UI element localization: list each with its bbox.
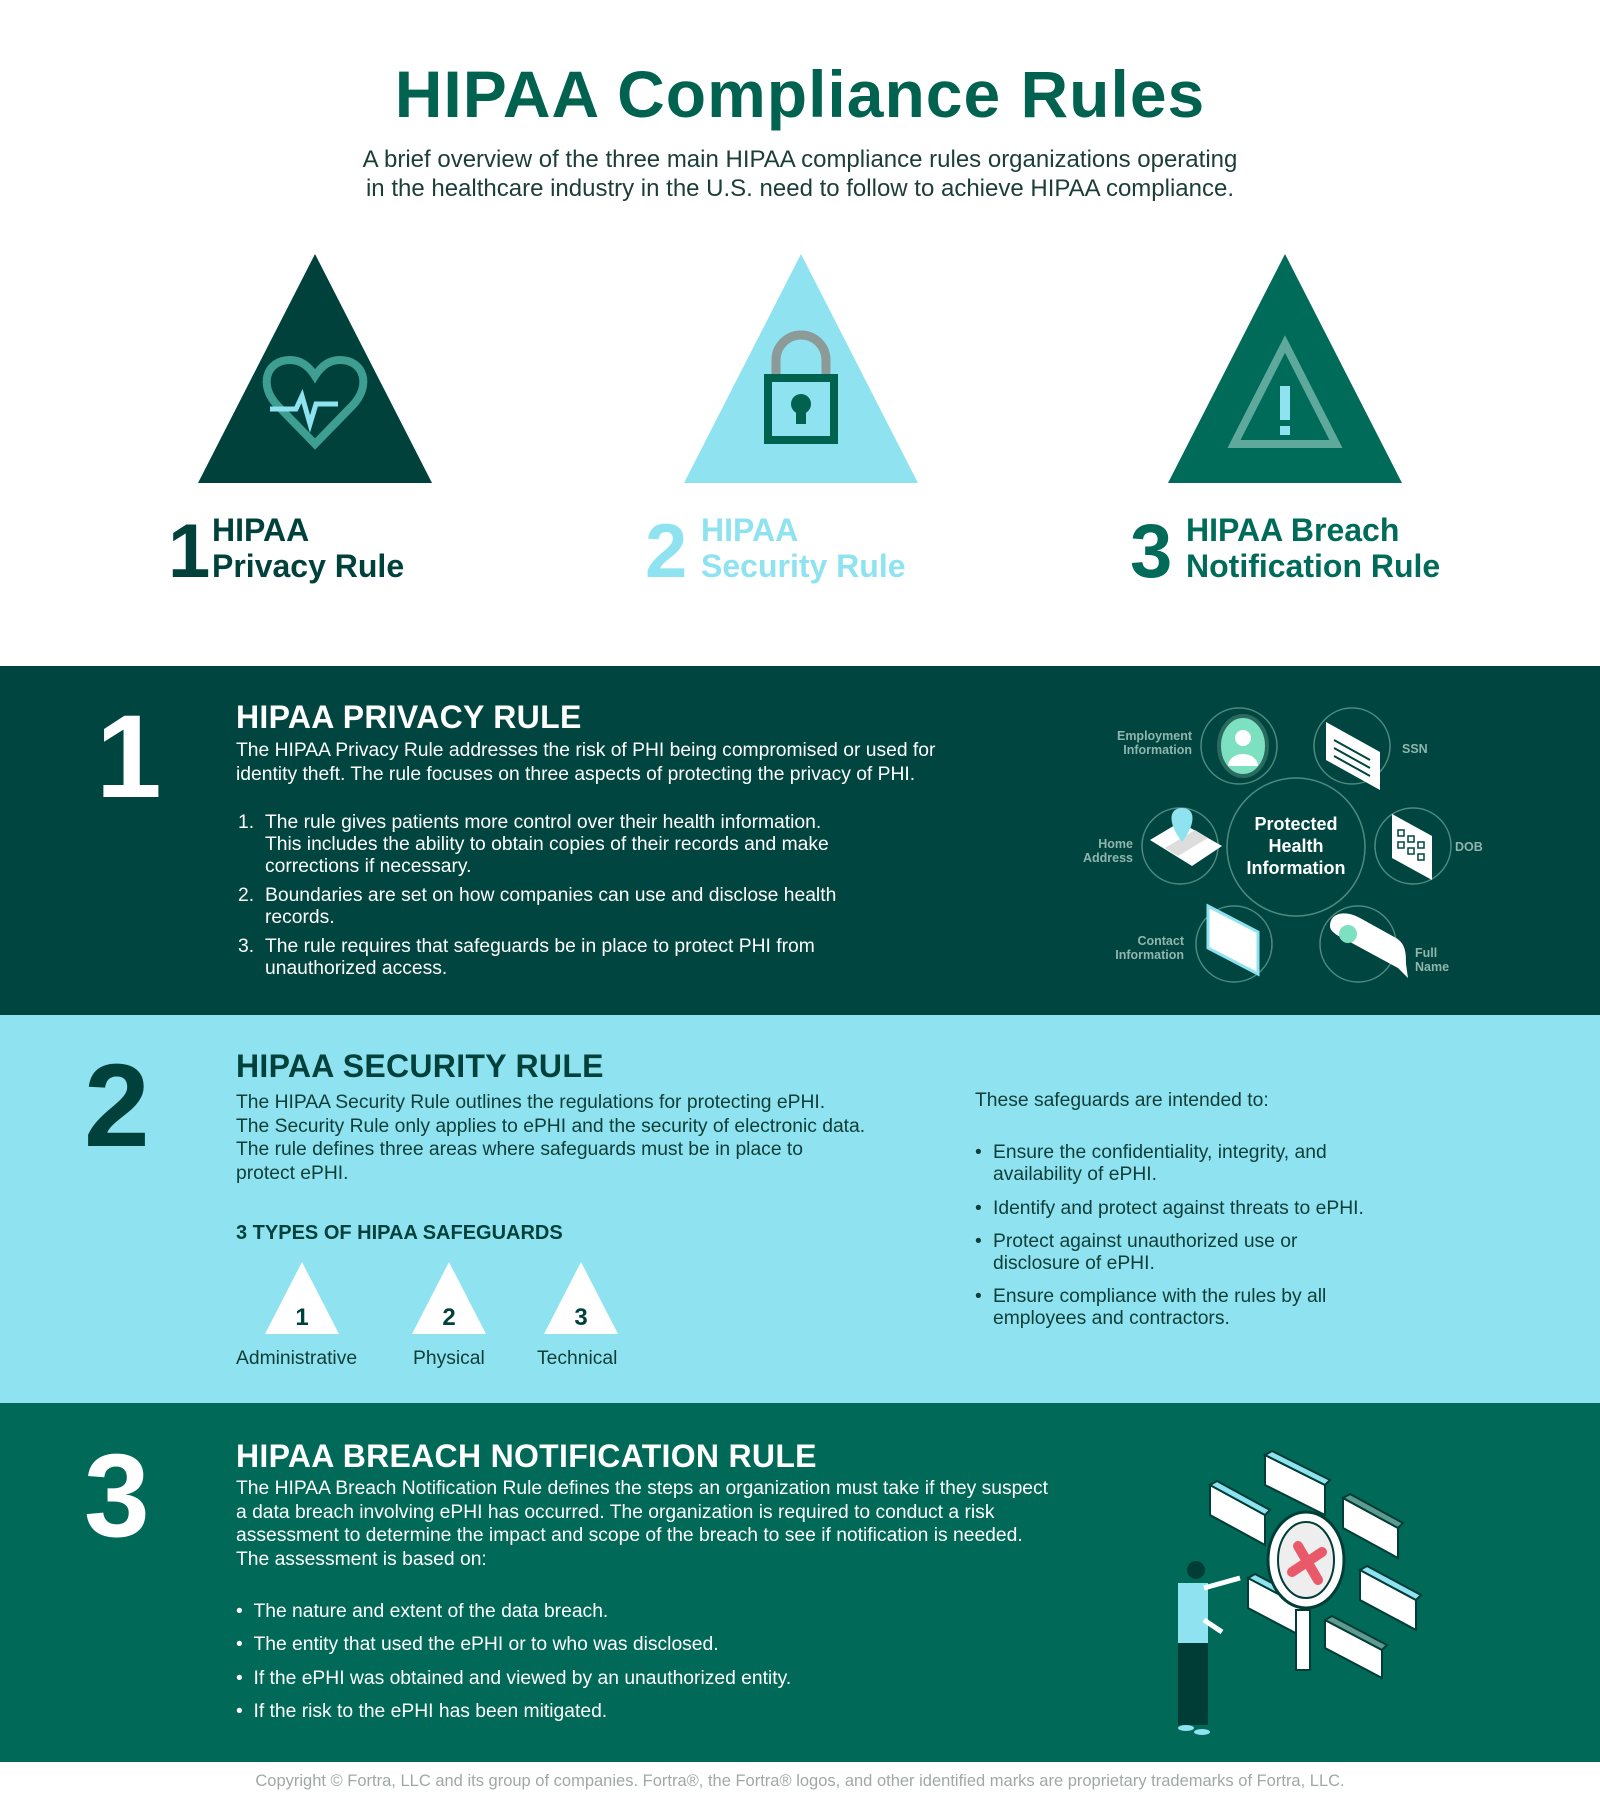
text: 1 xyxy=(168,509,210,594)
PHI diagram: DOB xyxy=(1455,840,1483,854)
paragraph: The HIPAA Privacy Rule addresses the risk of PHI being compromised or used for xyxy=(236,740,935,761)
panel: security rule: availability of ePHI. xyxy=(993,1164,1157,1185)
rule label 1 xyxy=(168,509,404,594)
icon: breach triangle xyxy=(1168,254,1402,483)
icon: security triangle xyxy=(684,254,918,483)
panel: security rule: employees and contractors. xyxy=(993,1308,1230,1329)
PHI diagram: Address xyxy=(1083,851,1133,865)
paragraph: The HIPAA Security Rule outlines the regulations for protecting ePHI. xyxy=(236,1092,825,1113)
panel: privacy rule: Boundaries are set on how companies can use and disclose health xyxy=(265,885,836,906)
panel: security rule: disclosure of ePHI. xyxy=(993,1253,1155,1274)
panel: security rule: Protect against unauthorized use or xyxy=(993,1231,1297,1252)
panel: privacy rule: unauthorized access. xyxy=(265,958,447,979)
panel: security rule: • xyxy=(975,1286,982,1307)
panel: breach notification rule: • The entity that used the ePHI or to who was disclosed. xyxy=(236,1634,719,1655)
text: 3 xyxy=(1130,509,1172,594)
text: Notification Rule xyxy=(1186,548,1440,584)
PHI diagram: Contact xyxy=(1137,934,1185,948)
paragraph xyxy=(236,740,936,784)
PHI diagram: Employment xyxy=(1117,729,1193,743)
PHI diagram: Name xyxy=(1415,960,1449,974)
panel: privacy rule: 3. xyxy=(238,936,254,957)
paragraph: protect ePHI. xyxy=(236,1162,349,1184)
panel: breach notification rule: • If the risk to the ePHI has been mitigated. xyxy=(236,1701,607,1722)
safeguard triangles xyxy=(236,1262,618,1369)
paragraph: The rule defines three areas where safeguards must be in place to xyxy=(236,1139,803,1160)
bullet list xyxy=(236,1601,791,1722)
text: HIPAA Breach xyxy=(1186,512,1399,548)
PHI diagram: Information xyxy=(1115,948,1184,962)
paragraph: The HIPAA Breach Notification Rule defines the steps an organization must take if they suspect xyxy=(236,1478,1048,1499)
safeguard triangles: 2 xyxy=(442,1304,456,1331)
heading: HIPAA SECURITY RULE xyxy=(236,1048,604,1084)
numbered list xyxy=(238,812,836,979)
number 3: 3 xyxy=(84,1430,146,1562)
text: 2 xyxy=(645,509,687,594)
panel: security rule: • xyxy=(975,1142,982,1163)
heading: HIPAA PRIVACY RULE xyxy=(236,699,582,735)
text: HIPAA xyxy=(701,512,798,548)
panel: security rule: Ensure the confidentiality, integrity, and xyxy=(993,1142,1327,1163)
paragraph: The Security Rule only applies to ePHI and the security of electronic data. xyxy=(236,1116,865,1136)
subtitle: in the healthcare industry in the U.S. need to follow to achieve HIPAA compliance. xyxy=(366,175,1234,202)
text: HIPAA xyxy=(212,512,309,548)
paragraph: assessment to determine the impact and scope of the breach to see if notification is needed. xyxy=(236,1525,1023,1546)
subtitle: A brief overview of the three main HIPAA compliance rules organizations operating xyxy=(363,146,1237,173)
PHI diagram: SSN xyxy=(1402,742,1428,756)
rule label 3 xyxy=(1130,509,1440,594)
footer: Copyright © Fortra, LLC and its group of companies. Fortra®, the Fortra® logos, and other identified marks are proprietary trademarks of Fortra, LLC. xyxy=(255,1772,1345,1790)
title: HIPAA Compliance Rules xyxy=(395,57,1205,131)
PHI diagram: Protected xyxy=(1254,814,1338,834)
panel: breach notification rule: • If the ePHI was obtained and viewed by an unauthorized entity. xyxy=(236,1668,791,1689)
panel: security rule: • xyxy=(975,1231,982,1252)
paragraph xyxy=(236,1092,865,1184)
paragraph xyxy=(236,1478,1048,1570)
PHI diagram: Health xyxy=(1268,836,1324,856)
panel: privacy rule: 1. xyxy=(238,812,254,833)
panel: privacy rule: 2. xyxy=(238,885,254,906)
PHI diagram xyxy=(1083,707,1483,983)
text: Security Rule xyxy=(701,548,906,584)
safeguard triangles: Physical xyxy=(413,1348,485,1369)
safeguard triangles: 1 xyxy=(295,1304,309,1331)
icon: privacy triangle xyxy=(198,254,432,483)
paragraph: identity theft. The rule focuses on three aspects of protecting the privacy of PHI. xyxy=(236,764,915,784)
PHI diagram: Full xyxy=(1415,946,1437,960)
panel: security rule: • xyxy=(975,1198,982,1219)
panel: privacy rule xyxy=(0,666,1600,1015)
panel: breach notification rule xyxy=(0,1403,1600,1762)
PHI diagram: Information xyxy=(1123,743,1192,757)
rule label 2 xyxy=(645,509,906,594)
panel: privacy rule: records. xyxy=(265,907,335,928)
panel: security rule: These safeguards are intended to: xyxy=(975,1090,1269,1111)
panel: security rule: Ensure compliance with the rules by all xyxy=(993,1286,1326,1307)
illustration: magnifier and person xyxy=(1178,1450,1422,1735)
number 2: 2 xyxy=(84,1040,146,1172)
panel: breach notification rule: • The nature and extent of the data breach. xyxy=(236,1601,608,1622)
panel: privacy rule: corrections if necessary. xyxy=(265,856,471,877)
panel: privacy rule: The rule requires that safeguards be in place to protect PHI from xyxy=(265,936,815,957)
safeguard triangles: Administrative xyxy=(236,1348,357,1369)
safeguards heading: 3 TYPES OF HIPAA SAFEGUARDS xyxy=(236,1222,563,1244)
panel: security rule: Identify and protect against threats to ePHI. xyxy=(993,1198,1364,1219)
panel: security rule xyxy=(0,1015,1600,1403)
panel: privacy rule: This includes the ability to obtain copies of their records and make xyxy=(265,834,829,855)
heading: HIPAA BREACH NOTIFICATION RULE xyxy=(236,1438,817,1474)
subtitle xyxy=(362,146,1237,202)
text: Privacy Rule xyxy=(212,548,404,584)
number 1: 1 xyxy=(96,691,158,823)
PHI diagram: Home xyxy=(1098,837,1133,851)
panel: privacy rule: The rule gives patients more control over their health information. xyxy=(265,812,821,833)
safeguard triangles: 3 xyxy=(574,1304,588,1331)
safeguards purpose list xyxy=(975,1090,1364,1329)
paragraph: a data breach involving ePHI has occurred. The organization is required to conduct a risk xyxy=(236,1502,994,1522)
PHI diagram: Information xyxy=(1246,858,1346,878)
safeguard triangles: Technical xyxy=(537,1348,617,1369)
paragraph: The assessment is based on: xyxy=(236,1548,487,1570)
